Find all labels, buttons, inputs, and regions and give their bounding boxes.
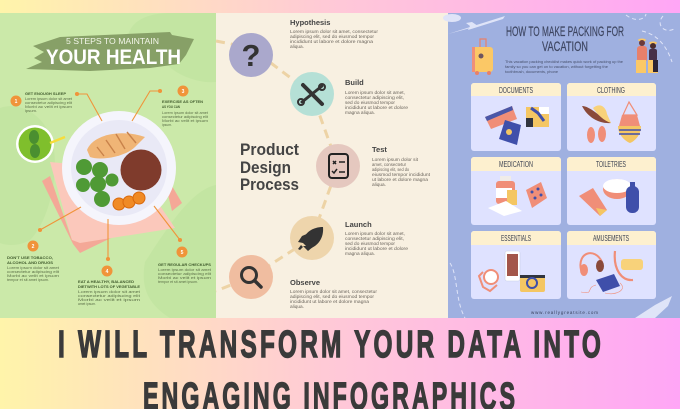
step 5: checkups [158,246,212,284]
step: hypothesis: ? [242,38,260,73]
step: observe: adipiscing elit, sed do eiusmod tempor [290,294,375,299]
step: build: magna aliqua. [345,110,375,115]
step 3: tobacco: consectetur adipiscing elit [7,270,59,274]
icon: suitcase [472,39,493,75]
step 2: exercise: consectetur adipiscing elit [162,115,208,119]
card: clothing: CLOTHING [597,86,625,95]
heading: how to make packing for vacation [506,23,624,54]
step: test: aliqua. [372,182,386,187]
step 1: Morbi ac velit et ipsum [25,105,72,109]
step: observe: aliqua. [290,304,304,309]
step 3: tobacco [7,240,60,282]
step 5: checkups: GET REGULAR CHECKUPS [158,263,212,267]
step 1: GET ENOUGH SLEEP [25,92,67,96]
step 1: Lorem ipsum dolor sit amet [25,97,72,101]
step: test: Lorem ipsum dolor sit [372,157,419,162]
step 3: tobacco: DON'T USE TOBACCO, [7,256,53,260]
step: test: ut labore et dolore magna [372,177,429,182]
step 1: ipsum. [25,109,37,113]
step 5: checkups: Morbi ac velit et ipsum [158,276,212,280]
card: clothing [567,83,656,151]
step: launch [290,216,409,260]
step: launch: Lorem ipsum dolor sit amet, [345,231,405,236]
step 4: balanced diet: consectetur adipiscing elit [78,294,140,298]
step 2: exercise: Morbi ac velit et ipsum [162,119,208,123]
card: medication [471,157,561,225]
heading: product design process: Process [240,175,299,194]
step: launch: Launch [345,220,372,229]
intro text [505,59,623,74]
step: build: consectetur adipiscing elit, [345,95,404,100]
title: 5 steps to maintain your health [26,32,194,71]
carrots [113,192,145,210]
card: toiletries [567,157,656,225]
step 4: balanced diet: amet ipsum. [78,302,96,306]
step: hypothesis: Lorem ipsum dolor sit amet, consectetur [290,29,379,34]
step 1 [10,92,72,113]
step: hypothesis: Hypothesis [290,18,330,27]
step 4: balanced diet: EAT A HEALTHY, BALANCED [78,280,134,284]
step 2: exercise: EXERCISE AS OFTEN [162,100,203,104]
step 3: tobacco: Morbi ac velit et ipsum [7,274,60,278]
intro text: family so you can get on to vacation, without forgetting the [505,64,608,69]
step: build: incididunt ut labore et dolore [345,105,409,110]
step 5: checkups: 5 [181,250,184,256]
step: launch: consectetur adipiscing elit, [345,236,404,241]
step: hypothesis: aliqua. [290,44,304,49]
illustration: plate with food [62,111,176,225]
intro text: This vacation packing checklist makes quick work of packing up the [505,59,623,64]
step 1: 1 [15,99,18,105]
step 4: balanced diet: Lorem ipsum dolor sit amet [78,290,140,294]
step 4: balanced diet: 4 [106,269,109,275]
step 3: tobacco: ALCOHOL AND DRUGS [7,261,54,265]
step 1: consectetur adipiscing elit [25,101,72,105]
step: test: amet, consectetur [372,162,407,167]
step: launch: incididunt ut labore et dolore [345,246,409,251]
step 4: balanced diet [78,266,141,306]
panel: packing for vacation [443,13,680,318]
step 5: checkups: tempor et sit amet ipsum. [158,280,198,284]
step: hypothesis: adipiscing elit, sed do eiusmod tempor [290,34,375,39]
step 3: tobacco: 2 [32,244,35,250]
heading: how to make packing for vacation: VACATION [542,38,588,54]
step: launch: sed do eiusmod tempor [345,241,396,246]
step: test: eiusmod tempor incididunt [372,172,431,177]
heading: product design process: Design [240,158,291,177]
step: build: Lorem ipsum dolor sit amet, [345,90,405,95]
step: hypothesis: incididunt ut labore et dolore magna [290,39,374,44]
step 2: exercise: Lorem ipsum dolor sit amet [162,111,208,115]
step 4: balanced diet: DIETWITH LOTS OF VEGETABLE [78,285,141,289]
step: observe [229,255,378,309]
step 5: checkups: Lorem ipsum dolor sit amet [158,268,211,272]
step: observe: incididunt ut labore et dolore magna [290,299,370,304]
step 5: checkups: consectetur adipiscing elit [158,272,211,276]
step 2: exercise: 3 [182,89,185,95]
chicken [87,133,145,159]
step 2: exercise: AS YOU CAN [162,105,180,109]
step: launch: magna aliqua. [345,251,375,256]
step: build [290,72,409,116]
step: observe: Lorem ipsum dolor sit amet, consectetur [290,289,378,294]
step 4: balanced diet: Morbi ac velit et ipsum [78,298,141,302]
headline [58,324,604,409]
card: essentials: ESSENTIALS [501,234,531,243]
step 2: exercise: ipsum. [162,123,172,127]
card: documents: DOCUMENTS [499,86,533,95]
step: test: adipiscing elit, sed do [372,167,410,172]
panel: health infographic [0,13,216,318]
step: hypothesis [229,18,379,77]
rice [120,150,162,190]
broccoli [76,159,118,207]
heading: product design process: Product [240,140,299,159]
icon: airplane [443,14,672,318]
step: test [316,144,431,188]
step: test: Test [372,145,387,154]
step 2: exercise [162,86,208,127]
leader lines [38,90,182,260]
card: medication: MEDICATION [499,160,533,169]
card: essentials [471,231,561,299]
step 3: tobacco: tempor et sit amet ipsum. [7,278,49,282]
card: amusements: AMUSEMENTS [593,234,629,243]
panel: product design process [216,13,448,318]
dashed connector [216,41,338,291]
card: documents [471,83,561,151]
card: toiletries: TOILETRIES [596,160,626,169]
illustration: napkin [42,162,182,253]
title: 5 steps to maintain your health: 5 STEPS TO MAINTAIN [66,37,159,46]
step: observe: Observe [290,278,320,287]
icon: green smoothie [16,125,65,163]
step: build: sed do eiusmod tempor [345,100,396,105]
step: build: Build [345,78,364,87]
heading: product design process [240,140,299,194]
step 3: tobacco: Lorem ipsum dolor sit amet [7,266,59,270]
icon: travellers [636,38,658,73]
website url: www.reallygreatsite.com [531,310,598,315]
decorative flight paths [450,14,676,318]
title: 5 steps to maintain your health: YOUR HEALTH [46,46,181,69]
card: amusements [567,231,656,299]
intro text: toothbrush, documents, phone [505,69,558,74]
